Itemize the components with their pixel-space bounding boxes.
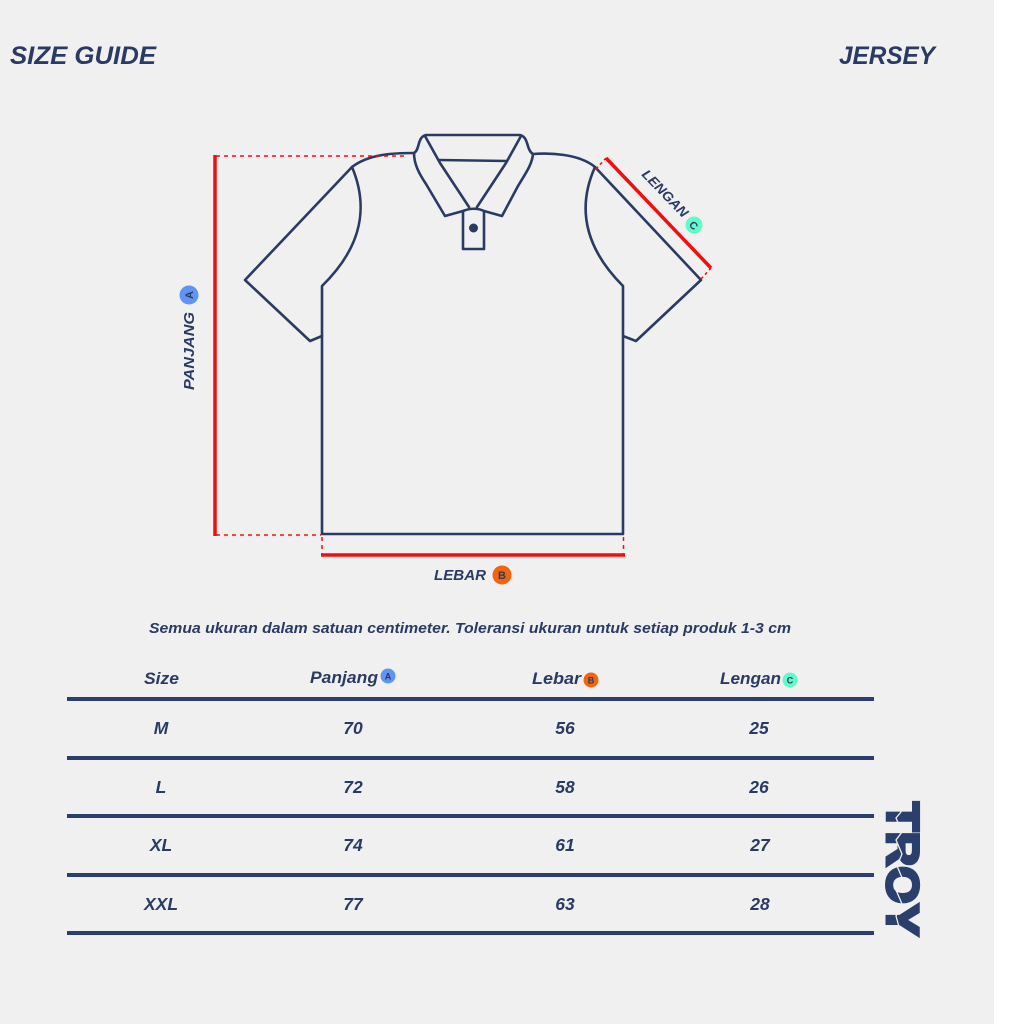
- label: lebar B: B: [498, 570, 506, 582]
- label: lengan C: C: [686, 219, 700, 233]
- label: lengan C: LENGAN: [639, 167, 691, 220]
- row XL: XL: [149, 835, 172, 855]
- row XL: 74: [343, 835, 363, 855]
- row XL: [149, 835, 771, 855]
- row M: 70: [343, 718, 363, 738]
- note text: Semua ukuran dalam satuan centimeter. Toleransi ukuran untuk setiap produk 1-3 cm: [149, 621, 791, 637]
- table header: B: [588, 676, 595, 686]
- table header: Size: [144, 669, 179, 688]
- row XXL: 63: [555, 894, 575, 914]
- title: jersey: JERSEY: [839, 42, 937, 70]
- row L: L: [156, 777, 166, 797]
- measure: lengan line: [596, 158, 711, 279]
- row L: 26: [748, 777, 769, 797]
- table header: Lebar: [532, 669, 582, 688]
- table header: Lengan: [720, 669, 781, 688]
- label: lebar B: [434, 566, 512, 584]
- table header: Panjang: [310, 668, 379, 687]
- table rules: [67, 697, 874, 935]
- label: lengan C: [639, 167, 702, 234]
- size table: [67, 668, 874, 935]
- label: panjang A: [180, 286, 198, 390]
- row M: 25: [748, 718, 769, 738]
- row XXL: 77: [343, 894, 364, 914]
- row XXL: 28: [749, 894, 770, 914]
- label: panjang A: A: [184, 291, 196, 299]
- label: panjang A: PANJANG: [182, 312, 198, 390]
- row L: 72: [343, 777, 363, 797]
- table header: A: [385, 672, 392, 682]
- measure: panjang line: [215, 155, 405, 536]
- table header: C: [787, 676, 794, 686]
- measure: lebar line: [321, 537, 625, 555]
- row L: [156, 777, 769, 797]
- table header: [144, 668, 798, 688]
- logo: TROY: TROY: [877, 802, 928, 936]
- row XXL: XXL: [143, 894, 178, 914]
- row L: 58: [555, 777, 575, 797]
- label: lebar B: LEBAR: [434, 568, 487, 584]
- row M: M: [154, 718, 169, 738]
- row M: [154, 718, 769, 738]
- row XL: 27: [749, 835, 771, 855]
- row M: 56: [555, 718, 575, 738]
- jersey outline illustration: [245, 135, 701, 534]
- title: size guide: SIZE GUIDE: [10, 42, 157, 70]
- row XXL: [143, 894, 770, 914]
- row XL: 61: [555, 835, 575, 855]
